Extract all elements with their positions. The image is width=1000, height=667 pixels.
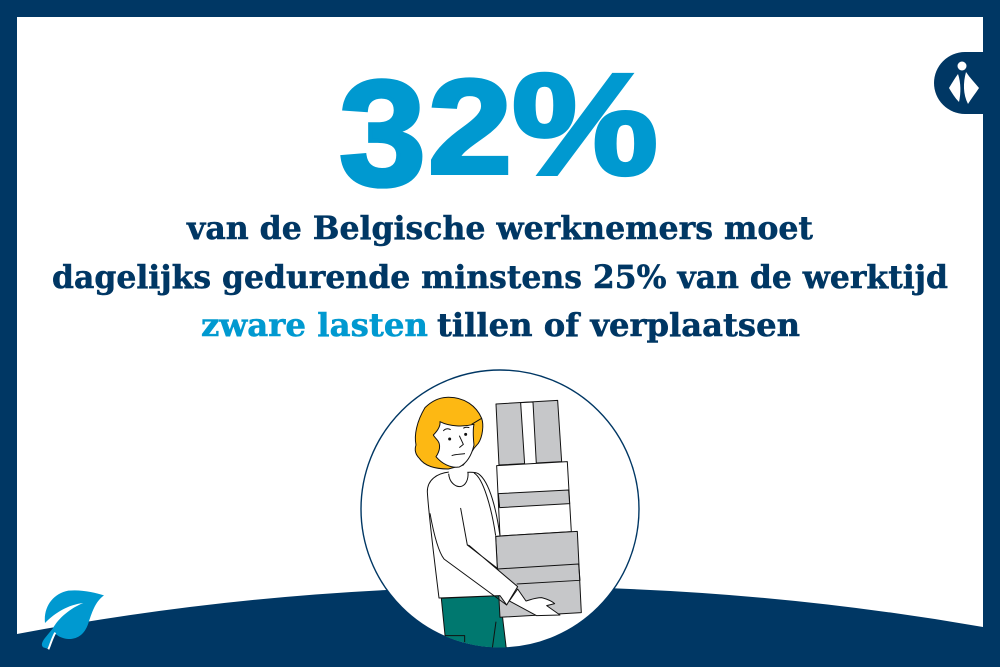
bottom navy hill	[17, 587, 983, 667]
line 1: van de Belgische werknemers moet	[186, 209, 813, 247]
face	[433, 422, 474, 467]
logo: institution badge	[934, 52, 983, 114]
icon: leaf logo	[42, 590, 104, 649]
facial features	[443, 427, 469, 456]
middle box	[497, 462, 571, 536]
bottom box	[496, 531, 581, 617]
top box	[496, 400, 562, 465]
digit 3: 3	[339, 49, 426, 217]
fringe line	[472, 418, 482, 424]
line 3 highlighted: zware lasten	[201, 306, 428, 344]
neckline	[448, 472, 468, 473]
percent sign: %	[512, 44, 658, 205]
trousers	[441, 596, 507, 652]
illustration circle	[361, 370, 639, 648]
illustration: woman carrying boxes	[415, 397, 581, 652]
line 3 rest: tillen of verplaatsen	[437, 306, 800, 344]
statement text	[52, 209, 948, 344]
hand	[509, 589, 560, 616]
big number: 32%	[339, 44, 658, 217]
body and sweater	[427, 472, 518, 605]
hair	[415, 397, 483, 469]
line 2: dagelijks gedurende minstens 25% van de werktijd	[52, 258, 948, 296]
digit 2: 2	[428, 53, 512, 202]
